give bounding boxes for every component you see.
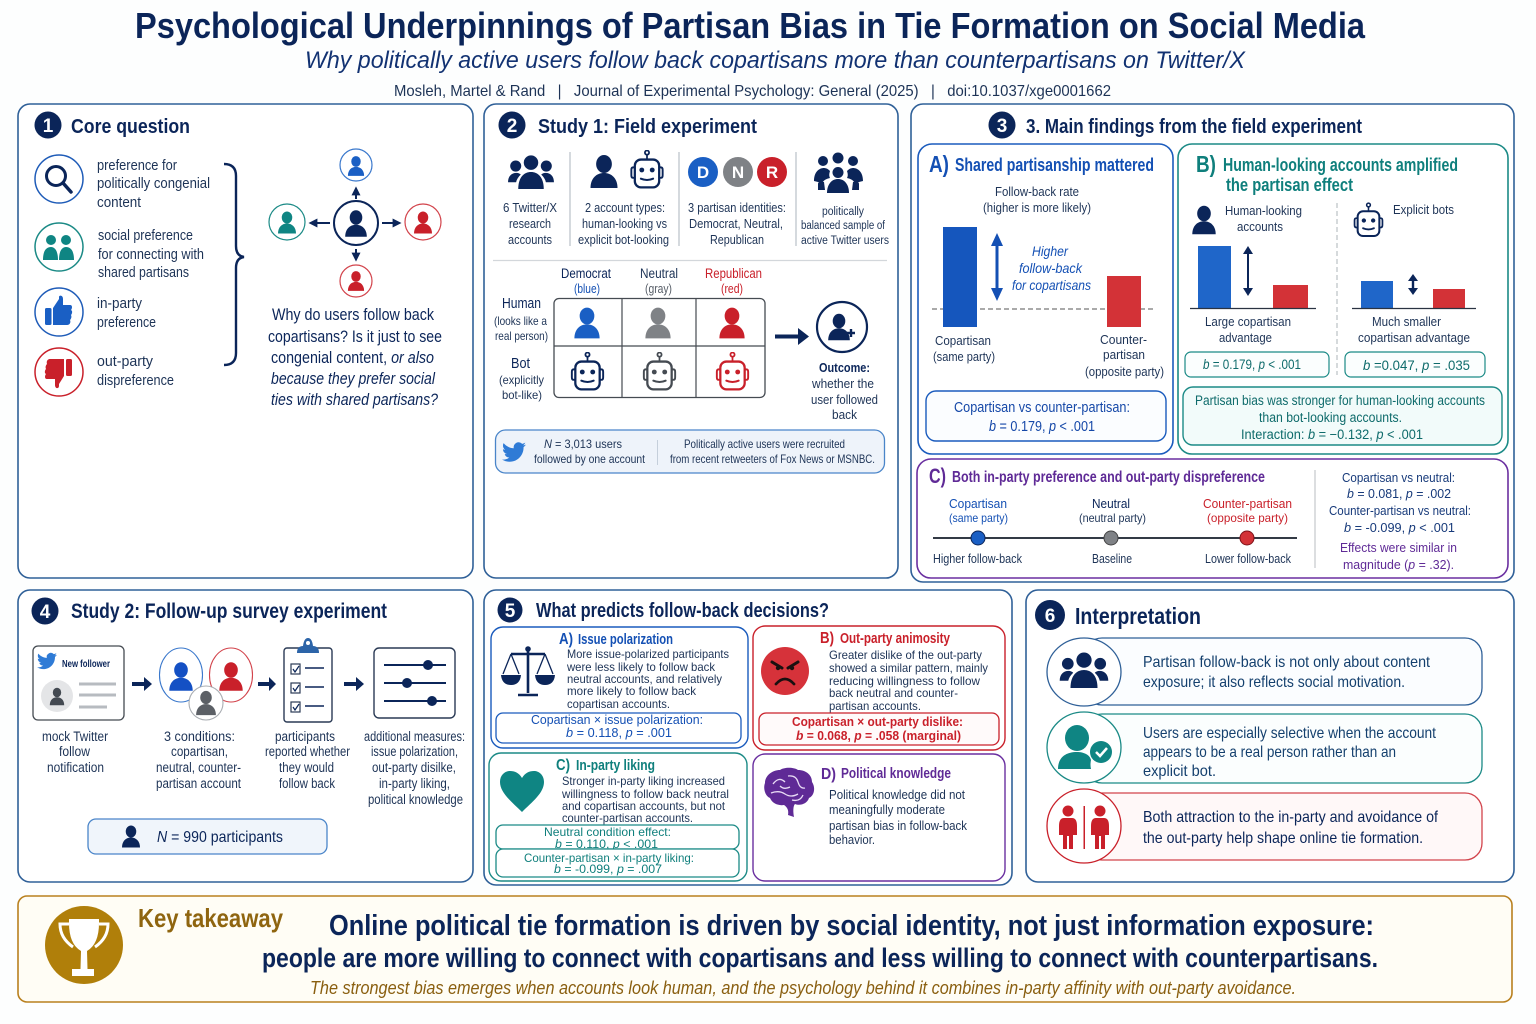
caption: notification: notification [47, 760, 104, 775]
stats C [1329, 470, 1471, 572]
row: social motivation: Partisan follow-back is not only about content [1143, 654, 1430, 671]
body: partisan bias in follow-back [829, 818, 967, 833]
three conditions [160, 648, 252, 720]
row: selective for real persons: appears to be a real person rather than an [1143, 744, 1396, 761]
sample callout: followed by one account [534, 452, 646, 466]
text: congenial content: politically congenial [97, 176, 210, 192]
body [829, 648, 988, 713]
stat box bot: b =0.047, p = .035 [1363, 357, 1470, 373]
caption: reported [265, 729, 350, 791]
title: Psychological Underpinnings of Partisan Bias in Tie Formation on Social Media [135, 5, 1366, 46]
caption: notification: mock Twitter [42, 729, 108, 744]
body: copartisan accounts. [567, 697, 670, 711]
row labels [494, 295, 548, 402]
caption: conditions: 3 conditions: [164, 729, 235, 744]
arrow [258, 677, 276, 691]
axis labels bottom: Lower follow-back [1205, 552, 1292, 566]
label: counter-partisan [1085, 332, 1164, 379]
axis labels bottom [933, 552, 1292, 566]
stat box bot [1345, 352, 1485, 377]
number badge 6: 6 [1045, 606, 1055, 627]
heading B: B) [1196, 151, 1216, 177]
icon: two people [35, 223, 83, 271]
card C: in-party liking [489, 753, 747, 881]
body: more likely to follow back [567, 684, 697, 698]
axis labels top: Copartisan [949, 496, 1007, 511]
heading: B) [820, 630, 834, 647]
main message: Online political tie formation is driven by social identity, not just information exposure: [329, 910, 1374, 942]
row: selective for real persons: Users are especially selective when the account [1143, 725, 1436, 742]
stat box neutral: Neutral condition effect: [544, 825, 671, 839]
heading C: C) [929, 465, 946, 488]
outcome text: back [832, 407, 857, 422]
caption: measures: issue polarization, [371, 744, 458, 759]
body: back neutral and counter- [829, 686, 958, 700]
caption: measures: additional measures: [364, 729, 465, 744]
heading B [1196, 151, 1458, 195]
heading C [929, 465, 1265, 488]
body: counter-partisan accounts. [562, 811, 693, 825]
icon: human accounts [1192, 206, 1216, 234]
question text [268, 306, 442, 409]
icon: brain [764, 768, 814, 817]
label: counter-partisan: Counter- [1100, 332, 1147, 347]
stat box: b = 0.118, p = .001 [566, 726, 672, 740]
annotation: higher follow-back: for copartisans [1012, 277, 1091, 293]
body: meaningfully moderate [829, 802, 945, 817]
chart caption [983, 184, 1091, 215]
body [829, 787, 967, 847]
column headers [561, 266, 762, 296]
label: counter-partisan: (opposite party) [1085, 364, 1164, 379]
bar chart: follow-back rate [932, 227, 1155, 327]
panel 2: study 1 [484, 104, 898, 578]
stat box neutral: b = 0.110, p < .001 [555, 837, 658, 851]
caption: notification [42, 729, 108, 775]
annotation: higher follow-back: Higher [1032, 243, 1069, 259]
icon: thumbs down [35, 348, 83, 396]
icon: angry face [761, 647, 809, 695]
main message: people are more willing to connect with copartisans and less willing to connect with counterpartisans. [262, 943, 1378, 973]
text: in-party preference: in-party [97, 296, 143, 312]
icons: D N R badges: R [766, 163, 778, 182]
heading: interpretation: Interpretation [1075, 603, 1201, 629]
number badge 5 [498, 598, 522, 622]
icon: thumbs up [35, 288, 83, 336]
row labels: Bot [511, 355, 531, 372]
stats C: Effects were similar in [1340, 540, 1457, 555]
chart caption: Follow-back rate [995, 184, 1079, 199]
text: social preference: for connecting with [98, 247, 204, 263]
heading [821, 765, 951, 783]
annotation: higher follow-back: follow-back [1019, 260, 1083, 276]
text: research accounts: research [509, 216, 551, 231]
column headers: Neutral [640, 266, 678, 281]
condition grid [554, 298, 765, 398]
text: congenial content [97, 158, 210, 211]
interaction callout: than bot-looking accounts. [1259, 410, 1402, 425]
label: human accounts: Human-looking [1225, 203, 1302, 218]
body: were less likely to follow back [566, 660, 716, 674]
sample callout: Politically active users were recruited [684, 437, 845, 451]
stat box counter-partisan: b = -0.099, p = .007 [554, 862, 662, 876]
column headers: (red) [721, 282, 743, 296]
stats C: Counter-partisan vs neutral: [1329, 503, 1471, 518]
caption: reported: participants [275, 729, 335, 744]
heading: study 2: Study 2: Follow-up survey experiment [71, 599, 387, 623]
stat box neutral [496, 825, 739, 851]
heading: In-party liking [576, 758, 655, 774]
label: copartisan [933, 333, 995, 364]
axis labels top: (opposite party) [1207, 511, 1288, 525]
text: account types [578, 200, 669, 247]
axis labels top: (neutral party) [1079, 511, 1146, 525]
label: copartisan: Copartisan [935, 333, 991, 348]
citation: Mosleh, Martel & Rand | Journal of Experimental Psychology: General (2025) | doi:10.1037/xge0001662 [394, 83, 1111, 100]
text: research accounts: accounts [508, 232, 552, 247]
panel 6: interpretation [1026, 590, 1514, 882]
text: in-party preference [97, 296, 156, 331]
stat box: Copartisan × issue polarization: [531, 713, 703, 727]
icon: research accounts [508, 155, 554, 189]
icons: D N R badges: D [697, 163, 709, 182]
heading: main findings: 3. Main findings from the field experiment [1026, 115, 1362, 138]
card D: political knowledge [753, 754, 1005, 881]
heading: Out-party animosity [840, 631, 950, 647]
caption: measures [364, 729, 465, 807]
label: explicit bots: Explicit bots [1393, 202, 1454, 217]
body: partisan accounts. [829, 699, 921, 713]
caption: reported: reported whether [265, 744, 350, 759]
body: neutral accounts, and relatively [567, 672, 722, 686]
body: reducing willingness to follow [829, 674, 980, 688]
heading [559, 631, 673, 648]
panel 1: core question [18, 104, 473, 578]
text: balanced sample: active Twitter users [801, 235, 889, 247]
axis labels bottom: Higher follow-back [933, 552, 1023, 566]
annotation: higher follow-back [1012, 243, 1091, 293]
bar chart: human accounts [1190, 246, 1316, 308]
chart caption: (higher is more likely) [983, 200, 1091, 215]
label: copartisan: (same party) [933, 349, 995, 364]
sample callout: N = 990 participants [157, 829, 283, 846]
axis labels top: (same party) [949, 511, 1008, 525]
heading A [929, 151, 1154, 177]
column headers: (blue) [574, 282, 600, 296]
column headers: Democrat [561, 266, 611, 281]
text: partisan identities: Republican [710, 232, 764, 247]
heading A: A) [929, 151, 949, 177]
body [561, 774, 729, 825]
label: key takeaway: Key takeaway [138, 903, 283, 933]
heading [556, 757, 655, 774]
body: Political knowledge did not [829, 787, 965, 802]
number badge 3: 3 [997, 116, 1007, 137]
brace [224, 164, 244, 365]
icon: balanced sample [814, 152, 863, 193]
stat box: b = 0.068, p = .058 (marginal) [796, 729, 961, 743]
arrow to outcome [775, 328, 809, 345]
text: research accounts [503, 200, 557, 247]
axis labels top [949, 496, 1292, 525]
stats C: b = -0.099, p < .001 [1344, 520, 1455, 535]
axis labels bottom: Baseline [1092, 552, 1132, 566]
body [566, 647, 729, 711]
stats C: magnitude (p = .32). [1343, 557, 1454, 572]
stat box [496, 713, 741, 743]
subpanel C [917, 459, 1508, 578]
main message [262, 910, 1378, 973]
text: social preference [98, 228, 204, 281]
sample callout [496, 430, 884, 473]
caption: smaller advantage: copartisan advantage [1358, 330, 1470, 345]
row: attraction and avoidance [1047, 789, 1482, 863]
body: Stronger in-party liking increased [562, 774, 725, 788]
number badge 1 [34, 112, 62, 138]
sample callout: from recent retweeters of Fox News or MSNBC. [670, 452, 875, 466]
text: balanced sample [801, 206, 889, 247]
body: behavior. [829, 832, 875, 847]
interaction callout: Partisan bias was stronger for human-looking accounts [1195, 393, 1485, 408]
row labels: Human [502, 295, 541, 312]
label: counter-partisan: partisan [1103, 347, 1145, 362]
number badge 2: 2 [507, 116, 517, 137]
label: human accounts [1225, 203, 1302, 234]
stat box human: b = 0.179, p < .001 [1203, 356, 1301, 372]
text: research accounts: 6 Twitter/X [503, 200, 557, 215]
text: out-party dispreference [97, 354, 174, 389]
panel 3: main findings [911, 104, 1514, 582]
heading: A) [559, 631, 573, 648]
number badge 3 [988, 112, 1016, 138]
heading C: Both in-party preference and out-party dispreference [952, 469, 1265, 486]
text: account types: explicit bot-looking [578, 232, 669, 247]
text: out-party dispreference: out-party [97, 354, 154, 370]
heading B: Human-looking accounts amplified [1223, 155, 1458, 175]
text: congenial content: content [97, 195, 141, 211]
caption: large advantage: Large copartisan [1205, 314, 1291, 329]
axis labels top: Counter-partisan [1203, 496, 1292, 511]
caption: conditions [156, 729, 241, 791]
heading: D) [821, 766, 836, 783]
row labels: (looks like a [494, 314, 547, 328]
outcome text [811, 360, 878, 422]
number badge 5: 5 [505, 601, 516, 622]
icon: trophy [45, 906, 123, 984]
subtitle: Why politically active users follow back copartisans more than counterpartisans on Twitter/X [305, 47, 1246, 74]
row: selective for real persons [1047, 712, 1482, 783]
interaction callout: Interaction: b = −0.132, p < .001 [1241, 427, 1423, 442]
outcome text: Outcome: [819, 360, 870, 375]
column headers: Republican [705, 266, 762, 281]
stats C: Copartisan vs neutral: [1342, 470, 1455, 485]
arrow [344, 677, 364, 691]
sample callout [88, 819, 327, 854]
stat box counter-partisan: Counter-partisan × in-party liking: [524, 851, 694, 865]
stats C: b = 0.081, p = .002 [1347, 486, 1451, 501]
outcome icon [817, 302, 867, 352]
text: partisan identities: Democrat, Neutral, [689, 216, 783, 231]
text: balanced sample: balanced sample of [801, 220, 886, 232]
panel 5: predictors [484, 590, 1012, 885]
question text: congenial content, or also [271, 349, 434, 367]
text: balanced sample: politically [822, 206, 864, 218]
row labels: real person) [495, 329, 548, 343]
body: Greater dislike of the out-party [829, 648, 982, 662]
text: congenial content: preference for [97, 158, 177, 174]
row: attraction and avoidance: Both attraction to the in-party and avoidance of [1143, 809, 1438, 826]
text: in-party preference: preference [97, 315, 156, 331]
sample callout: N = 3,013 users [544, 437, 622, 451]
icon: heart [500, 771, 544, 812]
bar chart: explicit bots [1352, 274, 1476, 308]
caption: conditions: copartisan, [171, 744, 228, 759]
row: selective for real persons: explicit bot. [1143, 763, 1216, 780]
row: social motivation [1047, 638, 1482, 706]
stat box counter-partisan [496, 849, 739, 877]
body: showed a similar pattern, mainly [829, 661, 988, 675]
stat box A [926, 391, 1166, 441]
subpanel A [918, 144, 1173, 454]
stat box human [1185, 352, 1329, 377]
number badge 4: 4 [40, 602, 51, 623]
question text: copartisans? Is it just to see [268, 328, 442, 346]
sliders [374, 648, 455, 718]
icon: magnifying glass [35, 155, 83, 203]
continuum [933, 531, 1297, 545]
icons: D N R badges: N [732, 163, 744, 182]
supporting sentence: The strongest bias emerges when accounts look human, and the psychology behind it combines in-party affinity with out-party avoidance. [310, 977, 1296, 998]
text: partisan identities [688, 200, 786, 247]
caption: reported: they would [279, 760, 334, 775]
heading B: the partisan effect [1226, 175, 1353, 195]
caption: measures: political knowledge [368, 792, 463, 807]
network diagram [269, 149, 441, 297]
caption: measures: out-party disilke, [372, 760, 456, 775]
heading: core question: Core question [71, 115, 190, 138]
caption: smaller advantage: Much smaller [1372, 314, 1442, 329]
stat box [759, 713, 999, 745]
text: account types: 2 account types: [585, 200, 665, 215]
column headers: (gray) [645, 282, 672, 296]
number badge 1: 1 [43, 116, 54, 137]
subpanel B [1178, 144, 1508, 454]
caption: reported: follow back [279, 776, 335, 791]
row: social motivation: exposure; it also reflects social motivation. [1143, 674, 1405, 691]
icon: human account [590, 155, 618, 188]
row labels: (explicitly [499, 373, 544, 387]
body: willingness to follow back neutral [561, 787, 729, 801]
axis labels top: Neutral [1092, 496, 1130, 511]
caption: conditions: neutral, counter- [156, 760, 241, 775]
number badge 6 [1035, 600, 1065, 630]
interaction callout [1183, 387, 1502, 445]
body: and copartisan accounts, but not [562, 799, 726, 813]
panel 4: study 2 [18, 590, 473, 882]
banner: key takeaway [18, 896, 1512, 1002]
caption: notification: follow [59, 744, 90, 759]
heading: study 1: Study 1: Field experiment [538, 115, 757, 138]
notification card: New follower [62, 659, 110, 670]
question text: because they prefer social [271, 370, 436, 388]
stat box A: Copartisan vs counter-partisan: [954, 400, 1130, 416]
heading [820, 630, 950, 647]
icons: D N R badges [688, 157, 787, 187]
icon: bot account [631, 151, 663, 187]
heading: C) [556, 757, 570, 774]
caption: measures: in-party liking, [379, 776, 450, 791]
text: account types: human-looking vs [582, 216, 667, 231]
question text: ties with shared partisans? [271, 391, 439, 409]
caption: large advantage [1205, 314, 1291, 345]
heading: Issue polarization [578, 632, 673, 648]
stat box A: b = 0.179, p < .001 [989, 419, 1095, 435]
card A: issue polarization [491, 627, 748, 748]
caption: conditions: partisan account [156, 776, 241, 791]
row: attraction and avoidance: the out-party help shape online tie formation. [1143, 830, 1423, 847]
outcome text: whether the [811, 376, 874, 391]
number badge 4 [32, 598, 58, 624]
row labels: bot-like) [502, 388, 542, 402]
heading: Political knowledge [841, 765, 951, 782]
card B: out-party animosity [753, 626, 1005, 750]
text: partisan identities: 3 partisan identities: [688, 200, 786, 215]
label: human accounts: accounts [1237, 219, 1283, 234]
arrow [132, 677, 152, 691]
caption: large advantage: advantage [1219, 330, 1272, 345]
number badge 2 [498, 112, 526, 138]
text: social preference: social preference [98, 228, 193, 244]
text: out-party dispreference: dispreference [97, 373, 174, 389]
question text: Why do users follow back [272, 306, 435, 324]
icon: explicit bots [1355, 203, 1382, 236]
icon: scales [501, 646, 555, 695]
outcome text: user followed [811, 392, 878, 407]
heading: predictors: What predicts follow-back decisions? [536, 600, 829, 622]
caption: smaller advantage [1358, 314, 1470, 345]
notification card [33, 646, 124, 720]
clipboard [284, 638, 332, 722]
stat box: Copartisan × out-party dislike: [792, 715, 963, 729]
body: More issue-polarized participants [567, 647, 729, 661]
heading A: Shared partisanship mattered [955, 155, 1154, 175]
text: social preference: shared partisans [98, 265, 189, 281]
